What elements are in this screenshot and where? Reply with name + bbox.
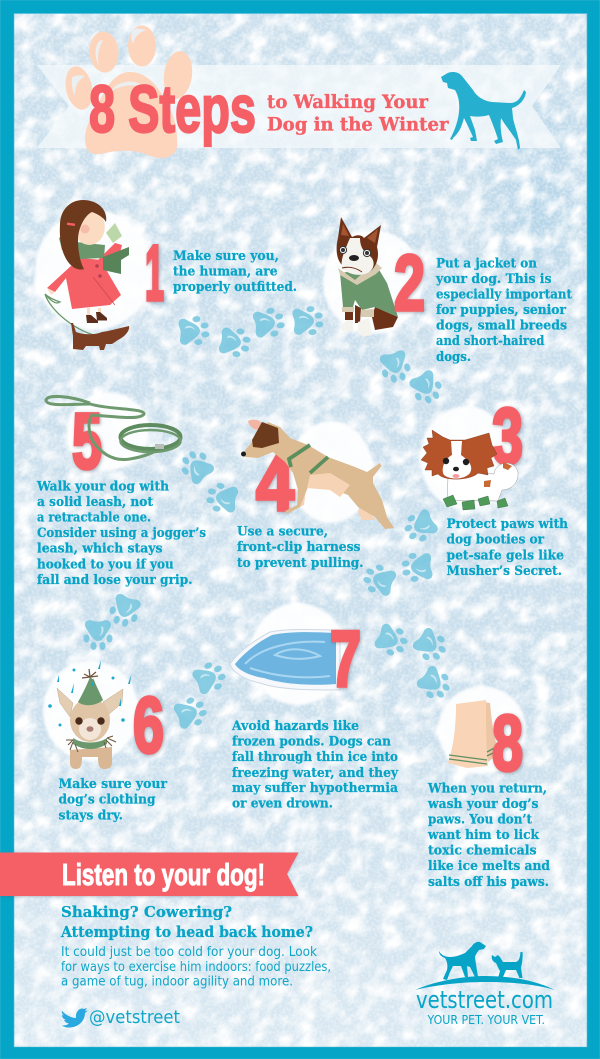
step 7: number: 7 — [330, 614, 361, 703]
title: subtitle: to Walking Your — [267, 92, 428, 113]
step 2: text: dogs, small breeds — [436, 318, 567, 334]
step 4: white circle — [289, 421, 373, 523]
step 3: papillon with booties — [421, 430, 518, 510]
step 2: text: dogs. — [436, 350, 471, 365]
listen subheading — [60, 904, 313, 941]
step 8: white circle — [438, 686, 526, 774]
paw prints between steps 5 and 6 — [84, 592, 143, 650]
step 8: number: 8 — [492, 698, 523, 787]
step 5: text: Walk your dog with — [36, 480, 170, 495]
step 4: dog with harness — [241, 420, 394, 529]
step 3: white circle — [420, 406, 512, 510]
logo: arc — [415, 976, 555, 990]
step 1: text: Make sure you, — [173, 249, 279, 264]
step 1: text: properly outfitted. — [173, 280, 297, 295]
step 8: text: want him to lick — [427, 828, 540, 843]
step 5: text: a retractable one. — [37, 511, 151, 526]
step 1: white circle — [35, 210, 153, 330]
step 8: text: like ice melts and — [428, 859, 550, 874]
step 6: number: 6 — [133, 680, 164, 769]
paw prints between steps 6 and 7 — [172, 658, 230, 731]
step 7: text: may suffer hypothermia — [232, 781, 399, 796]
title: subtitle — [267, 92, 449, 136]
title: 8 Steps: 8 Steps — [89, 72, 256, 147]
listen ribbon — [0, 852, 298, 896]
step 3: number: 3 — [492, 391, 523, 480]
step 8: text: toxic chemicals — [428, 844, 536, 859]
step 5: white circle — [67, 392, 149, 470]
step 7: white circle — [250, 603, 346, 705]
step 4: number: 4 — [256, 438, 294, 527]
step 4: text — [237, 525, 364, 571]
paw prints between steps 3 and 4 — [360, 507, 440, 598]
twitter handle: @vetstreet — [89, 1008, 180, 1028]
step 2: text: Put a jacket on — [436, 256, 537, 272]
step 5: text: fall and lose your grip. — [37, 573, 192, 588]
logo: tagline: YOUR PET. YOUR VET. — [427, 1012, 545, 1027]
step 8: text: salts off his paws. — [428, 875, 549, 890]
step 3: text: Protect paws with — [446, 517, 569, 532]
step 1: text — [173, 249, 297, 295]
title banner ribbon — [37, 65, 561, 148]
paw prints between steps 1 and 3 — [178, 305, 447, 408]
step 5: number: 5 — [72, 396, 102, 485]
icon: big peach paw — [62, 26, 195, 158]
step 2: number: 2 — [394, 238, 425, 327]
step 2: text: and short-haired — [436, 334, 544, 349]
vetstreet logo — [415, 942, 555, 1027]
step 2: text: especially important — [436, 288, 572, 303]
step 2: text: your dog. This is — [435, 272, 552, 287]
text: 1 — [145, 228, 164, 317]
listen body text: a game of tug, indoor agility and more. — [61, 975, 293, 990]
step 6: white circle — [43, 661, 139, 761]
step 2: text: for puppies, senior — [436, 303, 566, 318]
step 5: leash and collar — [46, 396, 180, 460]
icon: teal dog silhouette — [441, 72, 526, 150]
logo: dog and cat silhouette — [439, 942, 523, 980]
step 7: frozen pond — [230, 630, 340, 690]
step 6: text — [58, 777, 167, 823]
step 7: text: Avoid hazards like — [231, 719, 359, 734]
step 4: text: front-clip harness — [237, 540, 360, 555]
step 2: white circle — [323, 230, 423, 334]
step 3: text: dog booties or — [446, 533, 544, 548]
step 7: text: or even drown. — [232, 797, 333, 812]
step 7: text — [231, 719, 399, 812]
step 1: text: the human, are — [173, 264, 278, 280]
listen subheading: Shaking? Cowering? — [61, 904, 232, 921]
step 4: text: Use a secure, — [237, 525, 328, 540]
icon: twitter bird — [62, 1008, 88, 1028]
step 8: text: wash your dog’s — [427, 797, 538, 812]
step 6: text: Make sure your — [58, 777, 167, 792]
paw prints between steps 4 and 5 — [176, 445, 239, 515]
step 5: text — [36, 480, 206, 588]
paw prints between steps 7 and 8 — [372, 621, 456, 704]
step 6: text: dog’s clothing — [58, 793, 156, 808]
step 8: text: paws. You don’t — [428, 813, 532, 828]
step 2: boston terrier in jacket — [337, 217, 398, 336]
listen subheading: Attempting to head back home? — [60, 924, 313, 941]
step 6: text: stays dry. — [58, 808, 123, 823]
step 4: text: to prevent pulling. — [237, 556, 364, 571]
title: subtitle: Dog in the Winter — [267, 114, 449, 136]
step 7: text: frozen ponds. Dogs can — [232, 735, 392, 750]
step 3: text: pet-safe gels like — [446, 548, 564, 564]
listen body text: It could just be too cold for your dog. Look — [61, 945, 317, 960]
step 3: text: Musher’s Secret. — [446, 564, 562, 579]
step 5: text: hooked to you if you — [37, 557, 174, 572]
step 7: text: freezing water, and they — [232, 766, 398, 781]
step 1: girl illustration — [45, 200, 129, 350]
step 8: text: When you return, — [427, 781, 547, 796]
step 8: towel — [448, 700, 500, 768]
step 7: text: fall through thin ice into — [232, 750, 398, 765]
step 5: text: leash, which stays — [37, 542, 162, 557]
step 5: text: Consider using a jogger’s — [37, 526, 206, 541]
step 5: text: a solid leash, not — [37, 495, 153, 510]
logo: vetstreet.com wordmark: vetstreet.com — [416, 986, 553, 1014]
ribbon heading: Listen to your dog! — [62, 857, 265, 892]
step 3: text — [446, 517, 569, 579]
step 2: text — [435, 256, 572, 365]
step 6: chihuahua in hat and scarf — [48, 660, 131, 769]
listen body text: for ways to exercise him indoors: food puzzles, — [61, 960, 331, 975]
step 8: text — [427, 781, 550, 890]
listen body text — [61, 945, 331, 990]
